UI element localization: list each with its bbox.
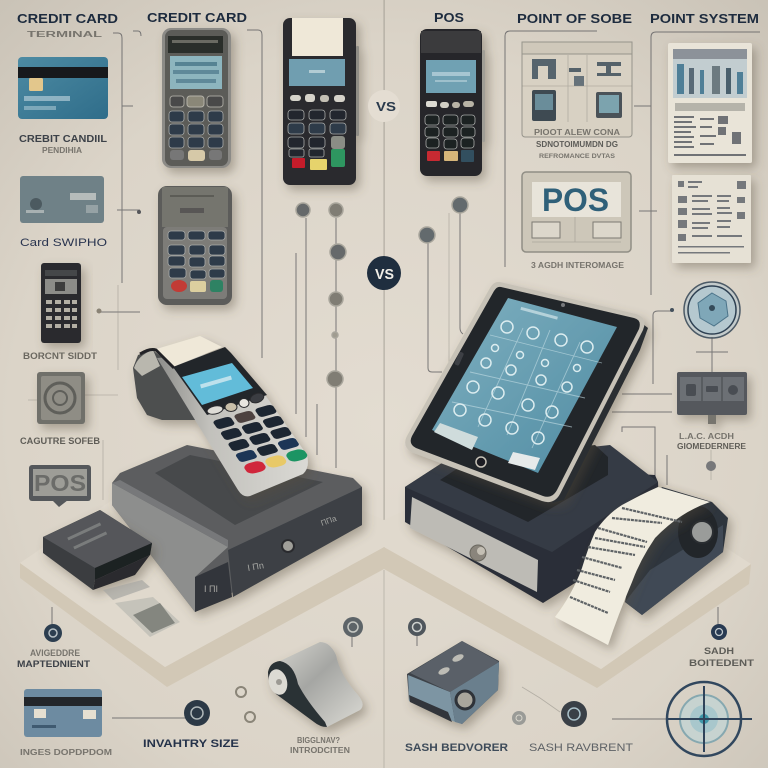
icon: connector dots <box>512 687 587 727</box>
label: point of sale captions: PIOOT ALEW CONA <box>534 128 620 137</box>
label: capture screen: CAGUTRE SOFEB <box>20 436 101 446</box>
connector lines: left column <box>28 30 336 500</box>
label: cash document: GIOMEDERNERE <box>677 442 747 451</box>
terminal: paper roll dark <box>283 18 359 185</box>
right receipt printer <box>625 487 728 615</box>
icon: pin right <box>408 618 426 646</box>
VS badge top <box>368 90 400 122</box>
label: maintenance: AVIGEDDRE <box>30 648 80 658</box>
icon: scanner device <box>407 641 499 724</box>
label: point of sale captions: REFROMANCE DVTAS <box>539 154 615 160</box>
receipt paper <box>555 487 710 645</box>
adhesive label: left <box>44 607 62 642</box>
label: point of sale captions: SDNOTOIMUMDN DG <box>536 140 618 149</box>
heading: credit card terminal: CREDIT CARD <box>17 11 118 26</box>
VS badge top: VS <box>376 99 396 114</box>
icon: POS badge: POS <box>34 470 86 496</box>
label: credit card: PENDIHIA <box>42 146 82 155</box>
label: sash devices <box>405 742 633 754</box>
label: introduction <box>290 736 350 755</box>
soft keys <box>206 391 265 416</box>
paper roll <box>153 336 222 367</box>
heading: POS: POS <box>434 10 464 25</box>
screen <box>182 363 253 405</box>
handle highlight <box>134 350 160 376</box>
panel: system document <box>668 43 752 163</box>
icon: pin sash <box>711 607 727 640</box>
arrow to inventory dot <box>112 717 186 719</box>
icons: small rings <box>236 687 255 722</box>
label: sash devices: SASH BEDVORER <box>405 742 508 754</box>
VS badge center: VS <box>375 266 394 283</box>
label: credit card: CREBIT CANDIIL <box>19 134 107 145</box>
label: introduction: INTRODCITEN <box>290 746 350 755</box>
label: credit card <box>19 134 107 155</box>
heading: credit card terminal <box>17 11 118 39</box>
panel: point of sale diagram <box>522 42 632 137</box>
icon: credit card blue <box>18 57 108 119</box>
label: maintenance: MAPTEDNIENT <box>17 659 91 669</box>
indicator dots: right <box>419 197 468 243</box>
label: introduction: BIGGLNAV? <box>297 736 340 745</box>
indicator dots: left <box>296 203 346 387</box>
icon: small terminal <box>41 263 81 343</box>
icon: pin left <box>343 617 363 647</box>
icon: small pin <box>706 450 716 480</box>
label: sash right: BOITEDENT <box>689 658 755 668</box>
label: maintenance <box>17 648 91 669</box>
label: sash devices: SASH RAVBRENT <box>529 742 633 754</box>
POS tablet <box>405 282 648 503</box>
icon: POS badge <box>29 465 91 507</box>
connector lines: right column <box>428 31 760 490</box>
label: sash right <box>689 646 755 668</box>
label: card bottom: INGES DOPDPDOM <box>20 748 112 757</box>
icon: paper roll <box>266 642 363 727</box>
large credit card terminal <box>133 336 309 496</box>
icon: grey card <box>20 176 104 223</box>
label: cash document <box>677 432 747 451</box>
label: inventory size: INVAHTRY SIZE <box>143 738 239 750</box>
label: sash right: SADH <box>704 646 734 656</box>
heading: point system: POINT SYSTEM <box>650 11 759 26</box>
icon: dark control box <box>677 372 747 424</box>
terminal: POS dark <box>420 29 485 176</box>
label: cash document: L.A.C. ACDH <box>679 432 734 441</box>
screen surround <box>173 347 267 415</box>
left cash base <box>112 445 362 612</box>
label: card swipe: Card SWIPHO <box>20 237 108 249</box>
heading: credit card: CREDIT CARD <box>147 10 247 25</box>
head band <box>140 350 174 368</box>
panel: POS sign: POS <box>542 182 609 218</box>
left cash base: I Πn <box>247 560 265 573</box>
silver body <box>157 353 308 496</box>
ticket below printer <box>103 580 180 637</box>
platform <box>20 440 751 688</box>
panel: POS sign <box>522 172 631 252</box>
label: point of sale captions <box>534 128 620 160</box>
icon: target crosshair <box>612 682 752 756</box>
label: receipt slot: BORCNT SIDDT <box>23 351 98 361</box>
terminal: keypad grey lower <box>158 186 232 305</box>
heading: credit card terminal: TERMINAL <box>27 30 102 39</box>
terminal: keypad grey <box>162 28 231 168</box>
left cash base: I ΠI <box>204 584 218 594</box>
left dark printer box <box>43 510 152 590</box>
handle <box>133 349 200 420</box>
left cash base: ΠΠa <box>320 514 338 528</box>
tablet stand and right cash drawer <box>405 445 660 603</box>
icon: target dial <box>670 282 740 374</box>
label: POS caption: 3 AGDH INTEROMAGE <box>531 261 625 270</box>
keypad <box>212 404 309 475</box>
heading: point of sale: POINT OF SOBE <box>517 11 632 26</box>
VS badge center <box>367 256 401 290</box>
icon: bottom card <box>24 689 102 737</box>
panel: receipt document <box>672 175 751 263</box>
icon: inventory dot <box>184 700 210 726</box>
icon: square badge <box>37 372 85 424</box>
